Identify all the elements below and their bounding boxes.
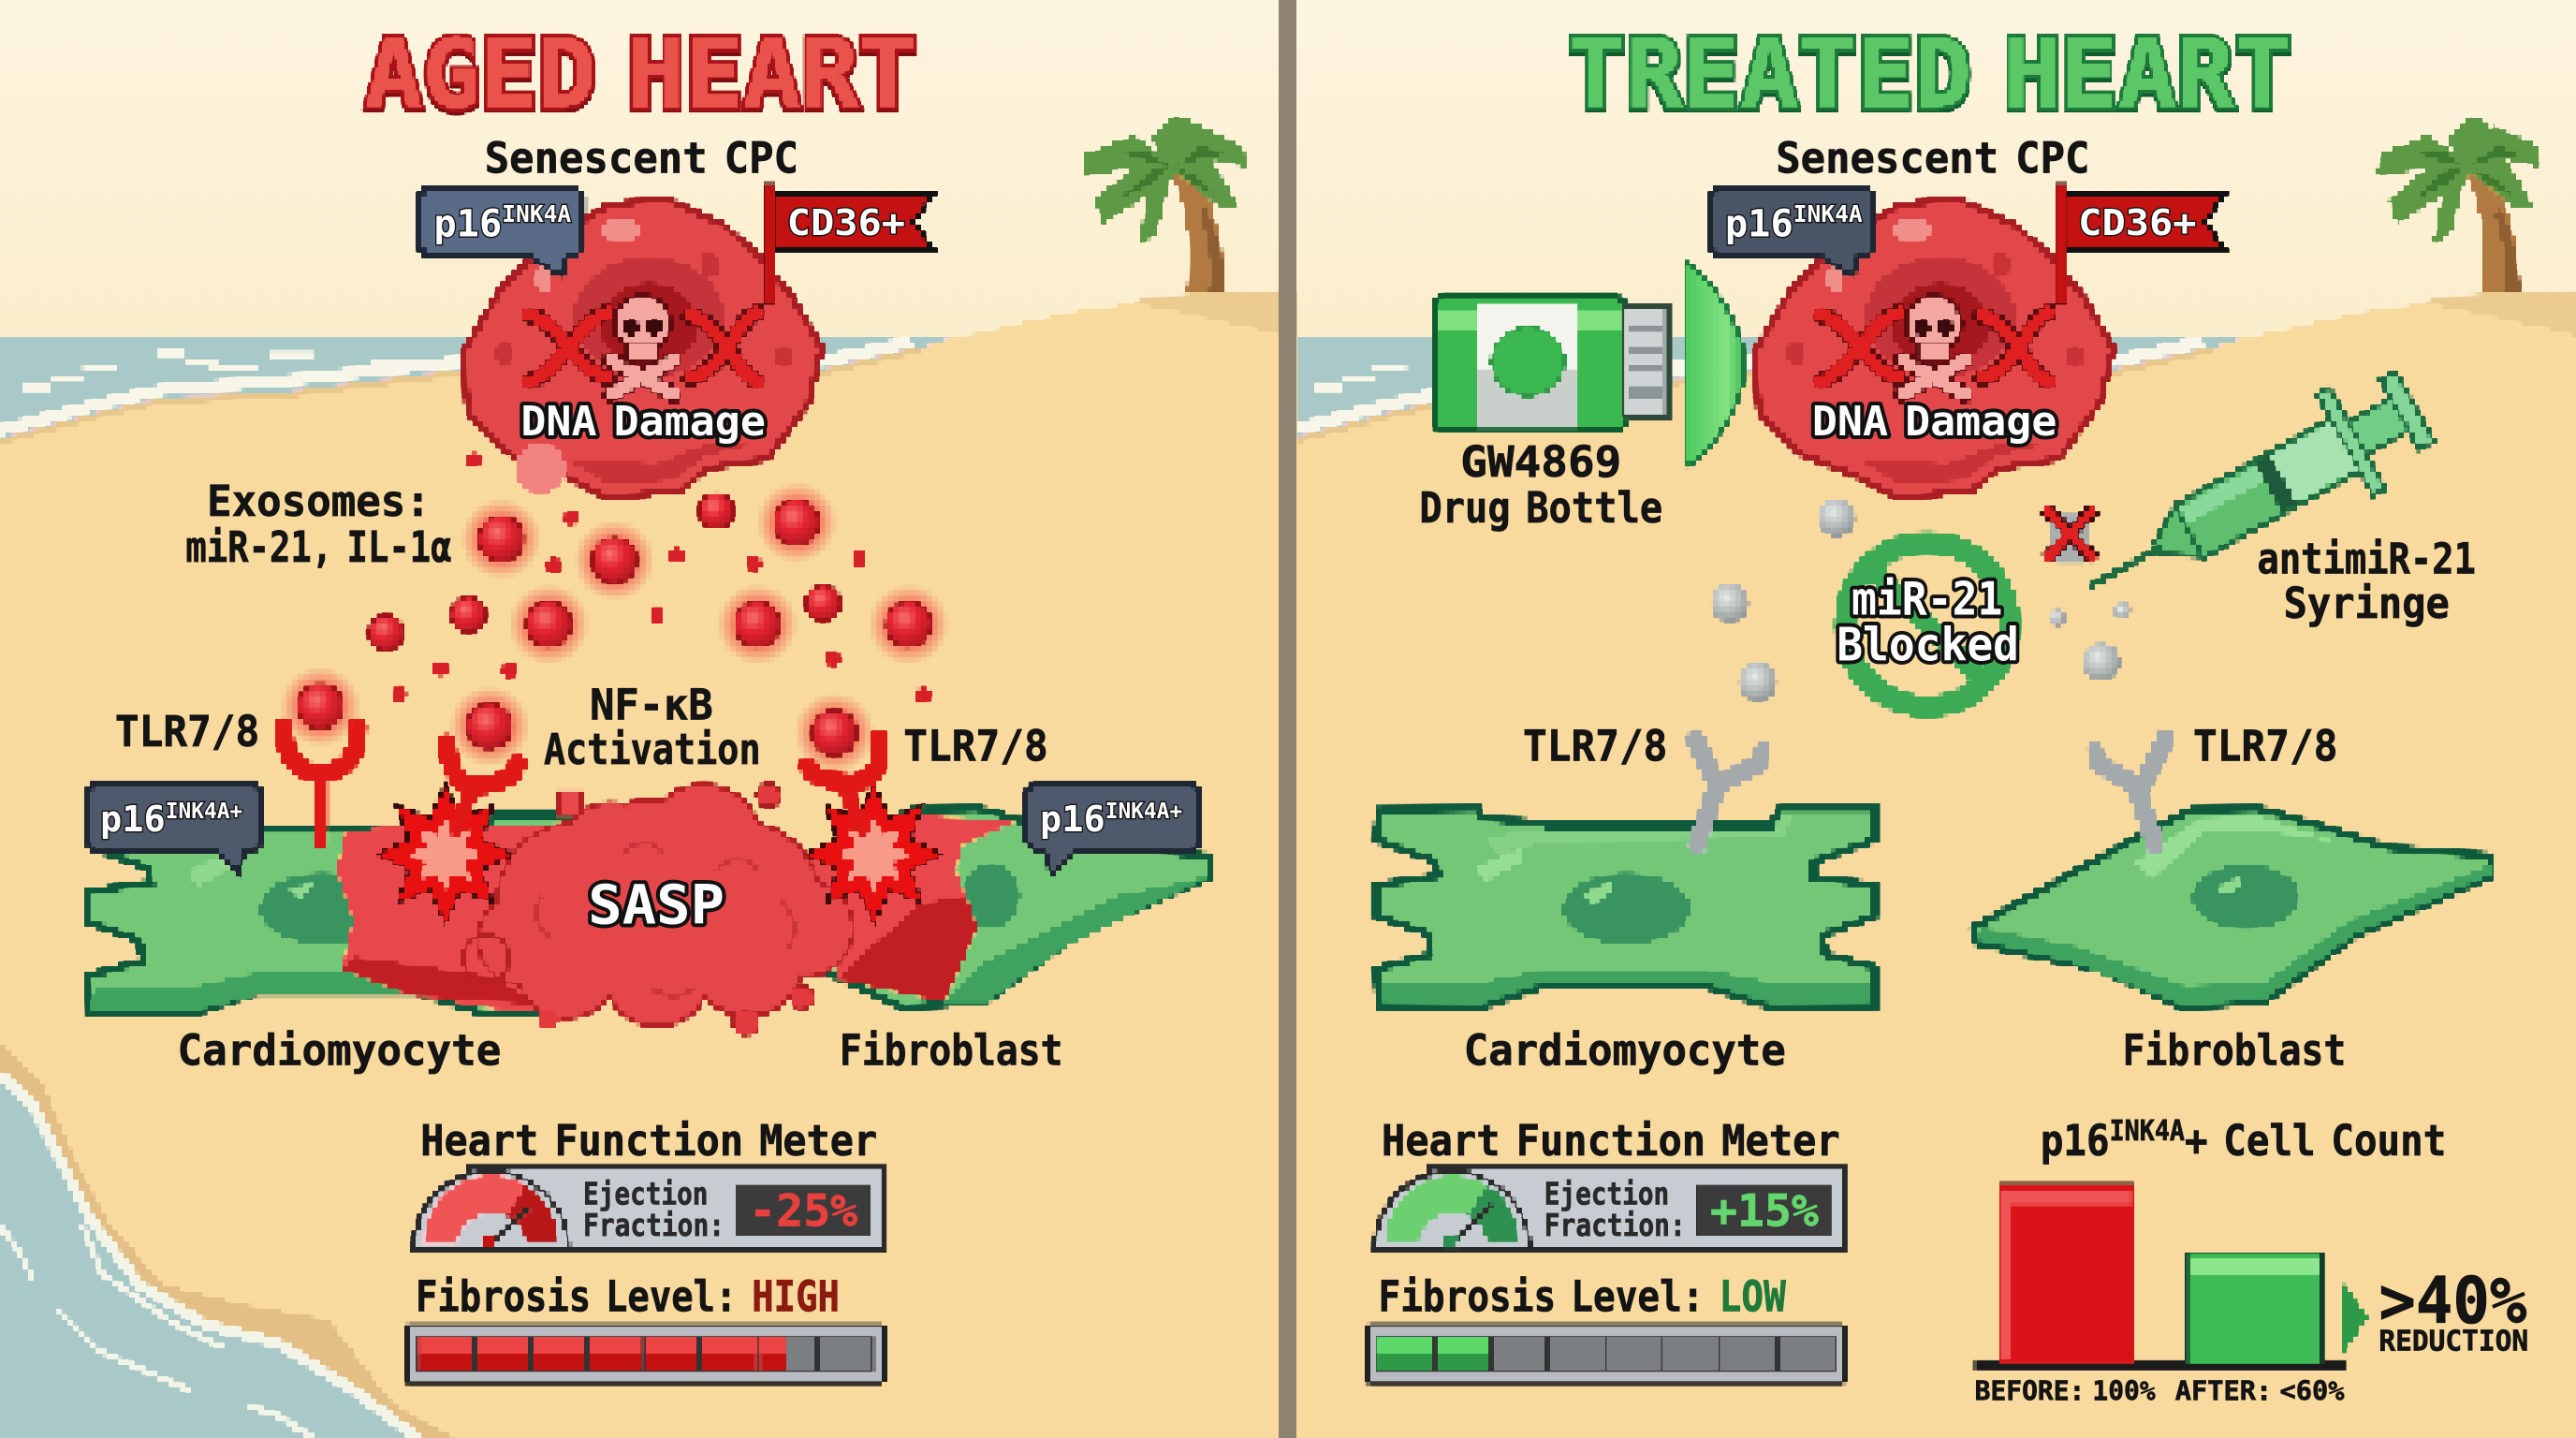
- label: p16 INK4A tag: INK4A: [502, 200, 571, 227]
- label: GW4869 drug bottle: Drug Bottle: [1419, 483, 1662, 533]
- label: p16 tag on cardiomyocyte: p16: [100, 799, 166, 841]
- label: ejection fraction: Ejection: [583, 1175, 708, 1211]
- red damage on cells: [337, 815, 1016, 1016]
- label: GW4869 drug bottle: GW4869: [1460, 437, 1621, 487]
- label: p16 tag on fibroblast: INK4A+: [1105, 800, 1182, 824]
- label: TLR7/8 right: TLR7/8: [2193, 722, 2338, 771]
- fibrosis level bar (low): [1367, 1326, 1845, 1382]
- label: after under 60%: AFTER: <60%: [2175, 1375, 2345, 1406]
- label: ejection fraction: [1544, 1175, 1686, 1243]
- label: NF-kB activation: NF-κB: [590, 681, 713, 730]
- palm tree right: [2380, 118, 2539, 292]
- exosome vesicles: [281, 444, 948, 772]
- cardiomyocyte (aged, infected): [89, 815, 587, 1014]
- label: miR-21 blocked: [1837, 571, 2019, 672]
- label: TLR7/8 left: TLR7/8: [115, 707, 259, 756]
- label: SASP: SASP: [588, 873, 724, 936]
- heart function meter panel: [414, 1168, 882, 1251]
- label: miR-21 blocked: miR-21: [1852, 571, 2002, 625]
- label: p16 tag on fibroblast: p16: [1040, 799, 1105, 841]
- label: DNA damage: DNA Damage: [1812, 398, 2056, 446]
- label: p16 INK4A tag: p16: [433, 202, 502, 246]
- label: CD36+ flag: CD36+: [787, 202, 905, 244]
- cardiomyocyte (healthy): [1377, 809, 1875, 1007]
- SASP cloud: [463, 784, 851, 1035]
- label: exosomes: miR-21, IL-1α: [185, 522, 452, 572]
- label: cardiomyocyte: Cardiomyocyte: [1464, 1025, 1786, 1075]
- label: cardiomyocyte: Cardiomyocyte: [178, 1025, 501, 1075]
- p16 speech tags: [87, 784, 1199, 874]
- label: antimiR-21 syringe: Syringe: [2284, 579, 2450, 628]
- heading: p16 cell count: p16: [2041, 1116, 2117, 1166]
- label: DNA damage: DNA Damage: [520, 398, 766, 446]
- label: TLR7/8 left: TLR7/8: [1523, 722, 1667, 771]
- fibroblast (aged, infected): [694, 809, 1211, 1007]
- senescent CPC cell (treated): [1710, 184, 2224, 498]
- icon: green shield: [1686, 263, 1745, 466]
- TLR7/8 receptors (inactive): [1695, 740, 2165, 846]
- label: ejection fraction: Fraction:: [583, 1207, 724, 1243]
- label: miR-21 blocked: Blocked: [1837, 618, 2019, 672]
- label: p16 INK4A tag: p16: [1725, 202, 1793, 246]
- label: exosomes: Exosomes:: [207, 477, 431, 526]
- label: antimiR-21 syringe: antimiR-21: [2258, 535, 2476, 584]
- heading: heart function meter: Heart Function Meter: [420, 1116, 877, 1166]
- label: senescent CPC: Senescent CPC: [1776, 133, 2089, 183]
- label: NF-kB activation: Activation: [544, 725, 761, 774]
- burst stars: [373, 782, 946, 927]
- heart function meter panel: [1375, 1168, 1843, 1251]
- label: fibroblast: Fibroblast: [840, 1025, 1063, 1075]
- label: TLR7/8 right: TLR7/8: [903, 722, 1048, 771]
- icon: GW4869 drug bottle: [1434, 298, 1667, 431]
- heading: p16 cell count: INK4A: [2110, 1115, 2185, 1148]
- label: fibrosis level high: Fibrosis Level: HIGH: [416, 1272, 840, 1322]
- label: fibroblast: Fibroblast: [2123, 1025, 2346, 1075]
- panel: treated heart: [1367, 20, 2528, 1406]
- heading: heart function meter: Heart Function Meter: [1382, 1116, 1840, 1166]
- label: exosomes: [185, 477, 452, 572]
- heading: p16 cell count: + Cell Count: [2185, 1116, 2446, 1166]
- beach: lower left sea: [0, 1043, 460, 1438]
- label: p16 tag on cardiomyocyte: INK4A+: [166, 800, 242, 824]
- bar chart: p16 cell count: [1975, 1184, 2345, 1369]
- callout: over 40% reduction: REDUCTION: [2378, 1326, 2528, 1358]
- callout: over 40% reduction: >40%: [2378, 1264, 2526, 1339]
- label: p16 INK4A tag: INK4A: [1793, 200, 1863, 227]
- label: antimiR-21 syringe: [2258, 535, 2476, 628]
- icon: red X on vesicle: [2045, 507, 2095, 564]
- divider between panels: [1279, 0, 1296, 1438]
- miR-21 blocked sign: [1845, 542, 2009, 707]
- fibrosis level bar (high): [406, 1326, 884, 1382]
- label: GW4869 drug bottle: [1419, 437, 1662, 533]
- label: fibrosis level low: Fibrosis Level: LOW: [1379, 1272, 1786, 1322]
- label: senescent CPC: Senescent CPC: [485, 133, 798, 183]
- title: aged heart: AGED HEART: [365, 20, 916, 130]
- label: CD36+ flag: CD36+: [2078, 202, 2197, 244]
- label: ejection fraction: Ejection: [1544, 1175, 1669, 1211]
- label: ejection fraction: [583, 1175, 724, 1243]
- label: before 100%: BEFORE: 100%: [1975, 1375, 2156, 1406]
- panel: aged heart: [87, 20, 1211, 1382]
- fibroblast (healthy): [1973, 809, 2491, 1007]
- palm tree left: [1086, 118, 1244, 292]
- TLR7/8 receptors (activated): [285, 726, 880, 842]
- title: treated heart: TREATED HEART: [1567, 20, 2291, 130]
- icon: reduction arrow: [2341, 1280, 2367, 1356]
- icon: antimiR-21 syringe: [2062, 357, 2442, 637]
- value: -25%: -25%: [749, 1185, 858, 1237]
- senescent CPC cell (aged): [419, 184, 933, 498]
- label: ejection fraction: Fraction:: [1544, 1207, 1686, 1243]
- value: +15%: +15%: [1710, 1185, 1819, 1237]
- inactive gray vesicles: [1711, 499, 2130, 701]
- label: NF-kB activation: [544, 681, 761, 774]
